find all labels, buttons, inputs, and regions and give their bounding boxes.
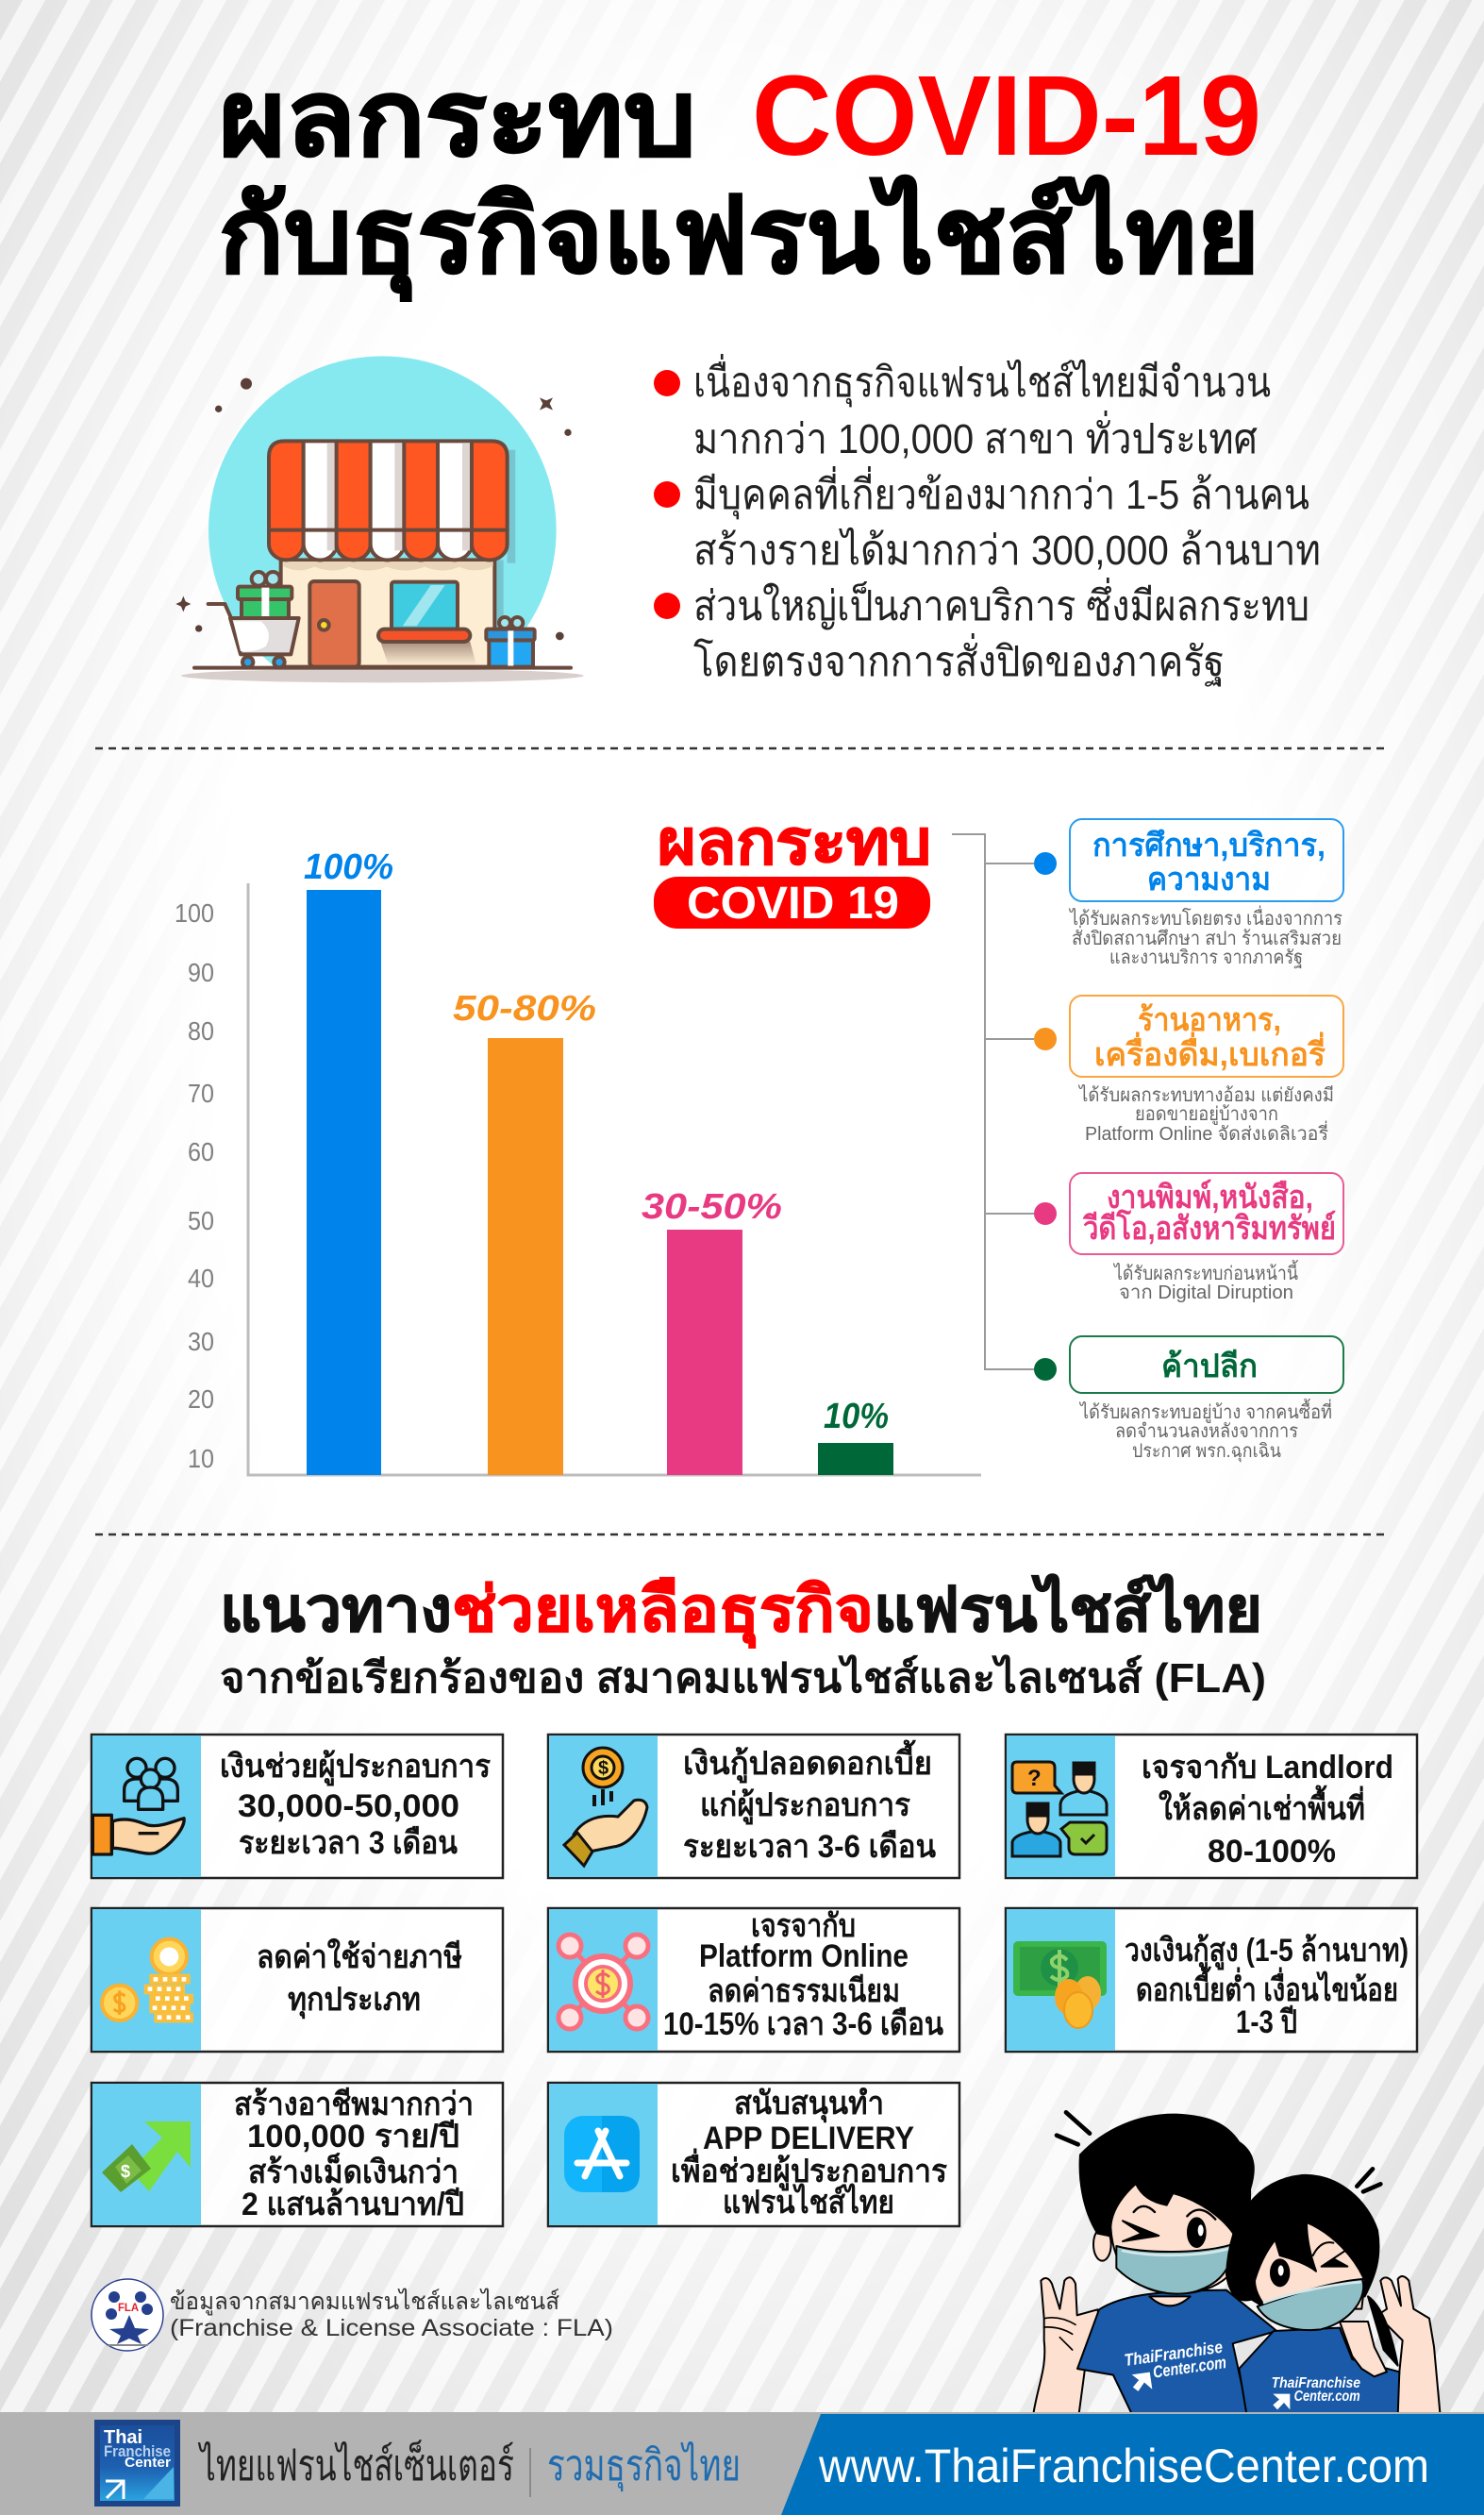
shirt logo: man: Center.com <box>1152 2353 1227 2382</box>
panel: retail <box>1034 1336 1343 1463</box>
bar: retail 10%: 10% <box>824 1397 889 1436</box>
title <box>219 51 1261 302</box>
logo: Thai Franchise Center <box>94 2420 180 2507</box>
panel: food and beverage: ยอดขายอยู่บ้างจาก <box>1135 1104 1278 1126</box>
panel: interest-free loan: แก่ผู้ประกอบการ <box>700 1787 911 1825</box>
heading: support guidelines: จากข้อเรียกร้องของ สมาคมแฟรนไชส์และไลเซนส์ (FLA) <box>220 1653 1266 1702</box>
panel: interest-free loan <box>548 1735 959 1878</box>
bar: education 100%: 100% <box>304 847 393 887</box>
panel: education and services: สั่งปิดสถานศึกษา สปา ร้านเสริมสวย <box>1072 925 1342 949</box>
panel: platform fee negotiation: Platform Online <box>699 1938 909 1974</box>
shirt logo: woman: Center.com <box>1294 2389 1360 2405</box>
panel: retail: ประกาศ พรก.ฉุกเฉิน <box>1132 1441 1281 1463</box>
footer: gray band: รวมธุรกิจไทย <box>547 2440 741 2492</box>
text block: introduction bullets: เนื่องจากธุรกิจแฟรนไชส์ไทยมีจำนวน <box>693 353 1271 408</box>
woman head <box>1226 2175 1378 2330</box>
panel: job creation <box>92 2083 503 2226</box>
icon: hand and coin: $ <box>598 1758 609 1779</box>
panel: app delivery support: APP DELIVERY <box>703 2121 914 2156</box>
footer: gray band <box>0 2412 1484 2515</box>
panel: interest-free loan: ระยะเวลา 3-6 เดือน <box>683 1829 936 1865</box>
illustration: two mascots wearing masks <box>1033 2112 1441 2416</box>
title: COVID-19 <box>752 51 1261 179</box>
icon: hand holding people <box>92 1758 184 1854</box>
icon: money growth arrow: $ <box>121 2162 130 2181</box>
icon: people negotiating <box>1012 1762 1107 1856</box>
text block: introduction bullets: สร้างรายได้มากกว่า 300,000 ล้านบาท <box>693 527 1321 574</box>
panel: landlord negotiation <box>1006 1735 1417 1878</box>
bar: food 50-80%: 50-80% <box>453 989 596 1029</box>
panel: platform fee negotiation <box>548 1908 959 2052</box>
panel: app delivery support <box>548 2083 959 2226</box>
heading: impact COVID 19: ผลกระทบ <box>658 807 931 877</box>
panel: retail: ลดจำนวนลงหลังจากการ <box>1115 1421 1298 1442</box>
footer: website banner <box>781 2414 1484 2515</box>
panel: cash aid: 30,000-50,000 <box>238 1788 459 1824</box>
icon: app store <box>564 2116 640 2192</box>
heading: support guidelines: ช่วยเหลือธุรกิจ <box>452 1574 874 1649</box>
panel: publishing and real estate: จาก Digital Diruption <box>1119 1283 1293 1303</box>
bar chart: 70 <box>188 1079 214 1108</box>
logo: Thai Franchise Center: Franchise <box>104 2442 171 2460</box>
title: กับธุรกิจแฟรนไชส์ไทย <box>219 176 1259 302</box>
panel: retail: ค้าปลีก <box>1161 1349 1258 1384</box>
text block: data source: ข้อมูลจากสมาคมแฟรนไชส์และไลเซนส์ <box>170 2288 559 2316</box>
panel: platform fee negotiation: เจรจากับ <box>751 1908 856 1944</box>
panel: job creation: 100,000 ราย/ปี <box>247 2119 459 2155</box>
icon: hand and coin <box>564 1748 647 1866</box>
panel: tax reduction: ลดค่าใช้จ่ายภาษี <box>257 1937 462 1975</box>
bar chart: 100 <box>175 898 214 928</box>
icon: FLA logo: FLA <box>118 2301 139 2314</box>
panel: soft loans: ดอกเบี้ยต่ำ เงื่อนไขน้อย <box>1136 1966 1398 2008</box>
panel: platform fee negotiation: 10-15% เวลา 3-6 เดือน <box>663 2006 943 2042</box>
shirt logo: man: ThaiFranchise <box>1123 2338 1224 2370</box>
heading: support guidelines: แนวทาง <box>220 1574 452 1644</box>
text block: introduction bullets: มีบุคคลที่เกี่ยวข้องมากกว่า 1-5 ล้านคน <box>693 465 1309 520</box>
panel: publishing and real estate: งานพิมพ์,หนังสือ, <box>1107 1179 1313 1216</box>
bar chart: 20 <box>188 1384 214 1414</box>
title: ผลกระทบ <box>219 59 696 177</box>
panel: cash aid <box>92 1735 503 1878</box>
panel: landlord negotiation: 80-100% <box>1208 1834 1336 1869</box>
panel: publishing and real estate: ได้รับผลกระทบก่อนหน้านี้ <box>1112 1260 1298 1284</box>
connector lines <box>952 834 1034 1369</box>
panel: education and services: ได้รับผลกระทบโดยตรง เนื่องจากการ <box>1068 905 1342 930</box>
bar: food 50-80% <box>453 989 596 1475</box>
heading: support guidelines: แฟรนไชส์ไทย <box>874 1573 1262 1644</box>
panel: tax reduction <box>92 1908 503 2052</box>
bar chart: 50 <box>188 1206 214 1235</box>
panel: landlord negotiation: เจรจากับ Landlord <box>1142 1750 1393 1786</box>
logo: Thai Franchise Center: Center <box>125 2455 171 2471</box>
bar chart: 60 <box>188 1137 214 1166</box>
panel: cash aid: ระยะเวลา 3 เดือน <box>239 1825 458 1861</box>
bar chart: 80 <box>188 1016 214 1046</box>
bar chart: 30 <box>188 1327 214 1356</box>
panel: education and services: ความงาม <box>1147 862 1271 897</box>
icon: banknote and coins <box>1013 1941 1107 2028</box>
panel: job creation: สร้างเม็ดเงินกว่า <box>248 2152 459 2190</box>
icon: money growth arrow <box>102 2121 191 2192</box>
panel: interest-free loan: เงินกู้ปลอดดอกเบี้ย <box>683 1739 932 1784</box>
panel: publishing and real estate <box>1034 1173 1343 1303</box>
panel: soft loans <box>1006 1908 1417 2052</box>
bar: education 100% <box>304 847 393 1475</box>
panel: job creation: สร้างอาชีพมากกว่า <box>234 2087 474 2122</box>
panel: soft loans: วงเงินกู้สูง (1-5 ล้านบาท) <box>1125 1933 1409 1970</box>
panel: tax reduction: ทุกประเภท <box>288 1982 421 2020</box>
panel: cash aid: เงินช่วยผู้ประกอบการ <box>220 1749 492 1786</box>
panel: app delivery support: เพื่อช่วยผู้ประกอบการ <box>671 2148 948 2191</box>
bar: media 30-50%: 30-50% <box>642 1187 782 1227</box>
panel: job creation: 2 แสนล้านบาท/ปี <box>242 2187 464 2222</box>
bar: retail 10% <box>818 1397 893 1475</box>
text block: introduction bullets: ส่วนใหญ่เป็นภาคบริการ ซึ่งมีผลกระทบ <box>693 577 1309 629</box>
shirt logo: woman <box>1272 2375 1360 2409</box>
panel: platform fee negotiation: ลดค่าธรรมเนียม <box>708 1973 900 2009</box>
panel: app delivery support: สนับสนุนทำ <box>734 2086 884 2123</box>
panel: education and services <box>1034 819 1343 968</box>
panel: soft loans: 1-3 ปี <box>1236 2004 1297 2040</box>
text block: data source: (Franchise & License Associate : FLA) <box>170 2315 613 2341</box>
text block: introduction bullets <box>654 353 1321 686</box>
bar chart: 90 <box>188 958 214 987</box>
icon: people negotiating: ? <box>1027 1766 1042 1791</box>
footer: website banner: www.ThaiFranchiseCenter.com <box>818 2440 1429 2492</box>
logo: Thai Franchise Center: Thai <box>104 2427 142 2448</box>
icon: target network <box>559 1935 648 2029</box>
panel: app delivery support: แฟรนไชส์ไทย <box>723 2183 894 2221</box>
panel: food and beverage: เครื่องดื่ม,เบเกอรี่ <box>1094 1031 1326 1073</box>
bar chart: 40 <box>188 1264 214 1293</box>
text block: data source <box>170 2288 613 2341</box>
panel: food and beverage: Platform Online จัดส่งเดลิเวอรี่ <box>1085 1120 1328 1145</box>
text block: introduction bullets: มากกว่า 100,000 สาขา ทั่วประเทศ <box>693 410 1258 462</box>
heading: impact COVID 19 <box>654 807 931 929</box>
bar chart: 10 <box>188 1444 214 1473</box>
heading: support guidelines <box>220 1573 1266 1702</box>
icon: shop illustration <box>175 356 584 704</box>
icon: FLA logo <box>92 2279 163 2351</box>
panel: publishing and real estate: วีดีโอ,อสังหาริมทรัพย์ <box>1082 1209 1336 1247</box>
footer: gray band: ไทยแฟรนไชส์เซ็นเตอร์ <box>197 2440 514 2490</box>
text block: introduction bullets: โดยตรงจากการสั่งปิดของภาครัฐ <box>693 632 1225 686</box>
panel: education and services: การศึกษา,บริการ, <box>1092 828 1326 863</box>
shirt logo: woman: ThaiFranchise <box>1272 2375 1360 2391</box>
bar chart <box>175 847 981 1475</box>
icon: gold coins <box>102 1939 193 2022</box>
panel: food and beverage: ได้รับผลกระทบทางอ้อม แต่ยังคงมี <box>1077 1084 1334 1106</box>
shirt logo: man <box>1125 2342 1226 2391</box>
heading: impact COVID 19: COVID 19 <box>687 879 899 929</box>
man head <box>1080 2115 1254 2294</box>
bar: media 30-50% <box>642 1187 782 1475</box>
panel: landlord negotiation: ให้ลดค่าเช่าพื้นที่ <box>1159 1785 1365 1827</box>
panel: food and beverage <box>1034 996 1343 1145</box>
panel: retail: ได้รับผลกระทบอยู่บ้าง จากคนซื้อที่ <box>1078 1399 1332 1424</box>
panel: food and beverage: ร้านอาหาร, <box>1138 1002 1281 1038</box>
panel: education and services: และงานบริการ จากภาครัฐ <box>1109 947 1303 968</box>
